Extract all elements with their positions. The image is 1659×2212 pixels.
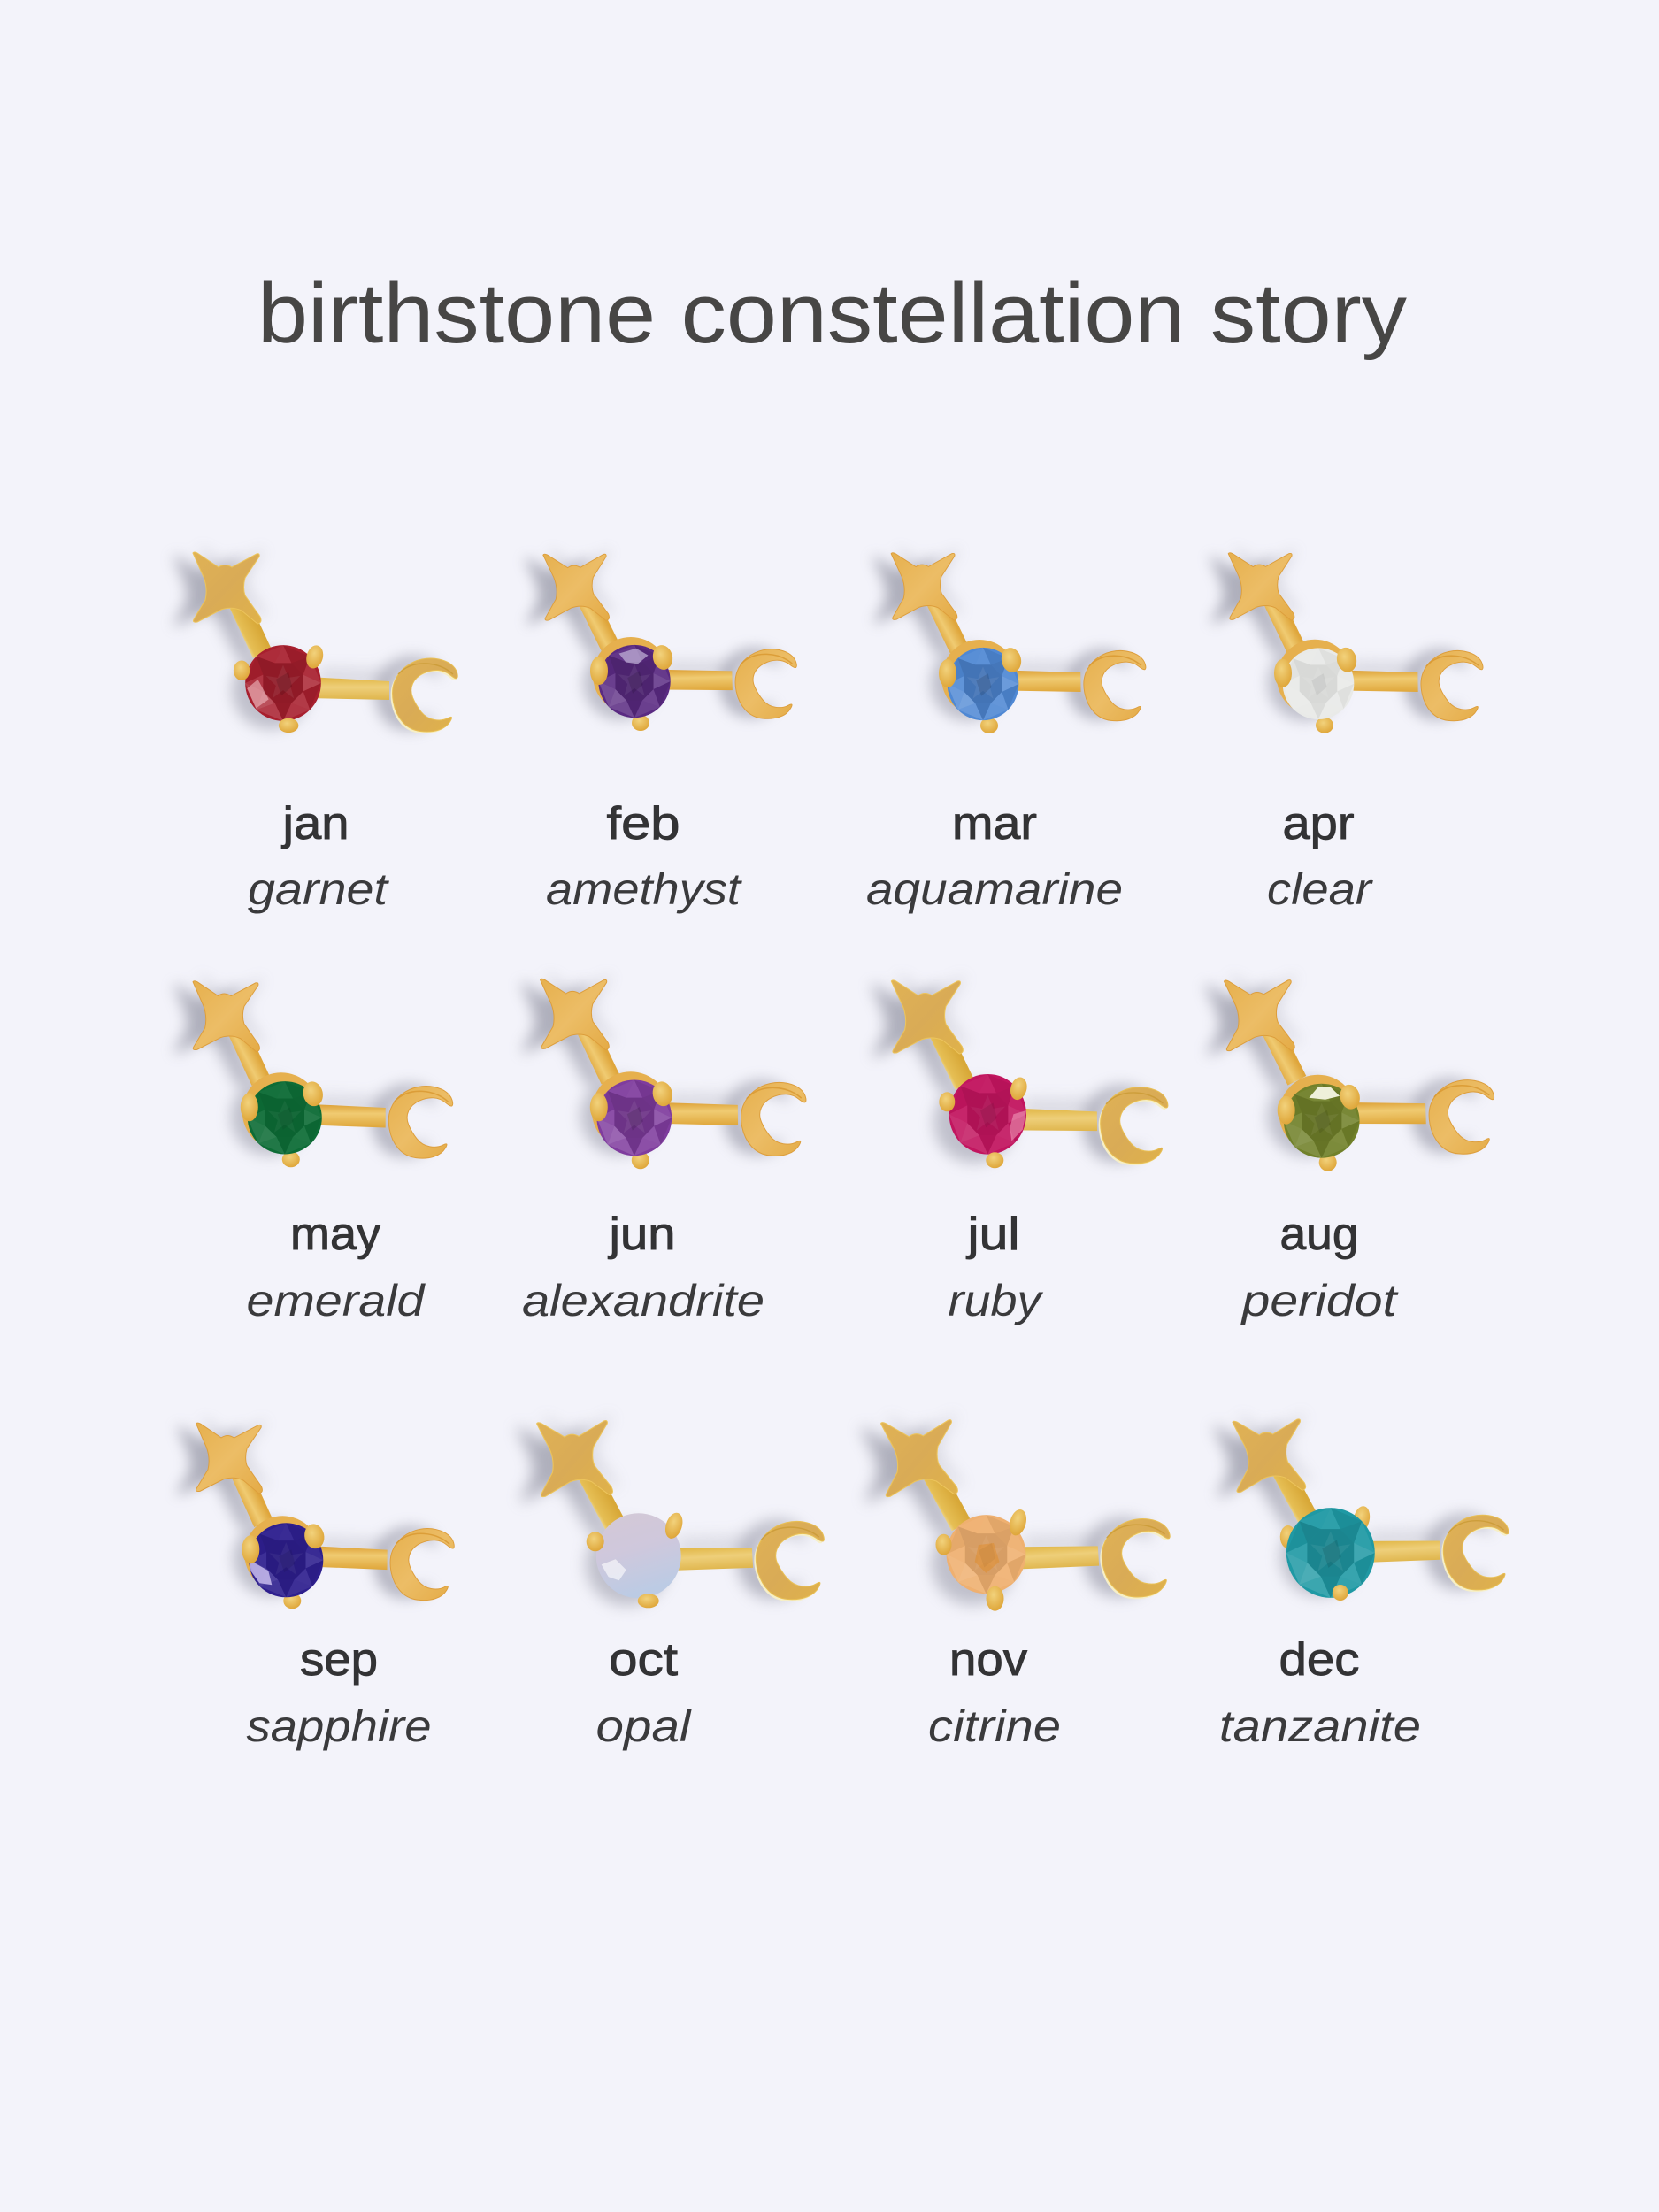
title: birthstone constellation story bbox=[257, 266, 1407, 361]
earring: clear bbox=[1210, 544, 1484, 733]
stone name: peridot: peridot bbox=[1240, 1276, 1399, 1325]
month: apr: apr bbox=[1283, 798, 1354, 849]
stone name: sapphire: sapphire bbox=[246, 1701, 432, 1751]
month: dec: dec bbox=[1279, 1634, 1359, 1686]
month: feb: feb bbox=[607, 798, 680, 849]
earring: sapphire bbox=[176, 1417, 455, 1609]
panel: may emerald bbox=[173, 976, 453, 1325]
earring: alexandrite bbox=[521, 971, 807, 1169]
month: aug: aug bbox=[1279, 1209, 1359, 1260]
month: nov: nov bbox=[949, 1634, 1027, 1686]
month: jun: jun bbox=[607, 1209, 676, 1260]
stone name: ruby: ruby bbox=[949, 1276, 1044, 1325]
panel: june alexandrite bbox=[521, 971, 807, 1325]
panel: november citrine bbox=[860, 1399, 1174, 1751]
earring: aquamarine bbox=[872, 544, 1147, 733]
earring: garnet bbox=[173, 547, 457, 733]
earring: amethyst bbox=[525, 543, 798, 731]
panel: august peridot bbox=[1204, 967, 1496, 1325]
stone name: garnet: garnet bbox=[248, 864, 389, 914]
earring: emerald bbox=[173, 976, 453, 1167]
earring: peridot bbox=[1204, 967, 1496, 1171]
stone name: alexandrite: alexandrite bbox=[522, 1276, 764, 1325]
month: jan: jan bbox=[280, 798, 349, 849]
stone name: amethyst: amethyst bbox=[546, 864, 742, 914]
stone name: emerald: emerald bbox=[246, 1276, 426, 1325]
earring: citrine bbox=[860, 1399, 1174, 1617]
stone name: aquamarine: aquamarine bbox=[866, 864, 1123, 914]
stone name: opal: opal bbox=[596, 1701, 693, 1751]
panel: october opal bbox=[516, 1402, 827, 1751]
earring: tanzanite bbox=[1212, 1401, 1512, 1607]
stone name: tanzanite: tanzanite bbox=[1219, 1701, 1421, 1751]
month: mar: mar bbox=[952, 798, 1037, 849]
earring: opal bbox=[516, 1402, 827, 1616]
earring: ruby bbox=[871, 971, 1169, 1169]
panel: september sapphire bbox=[176, 1417, 455, 1751]
month: sep: sep bbox=[300, 1634, 378, 1686]
stone name: citrine: citrine bbox=[928, 1701, 1061, 1751]
panel: january garnet bbox=[173, 547, 457, 914]
month: oct: oct bbox=[609, 1634, 679, 1686]
panel: march aquamarine bbox=[866, 544, 1147, 914]
month: may: may bbox=[290, 1209, 380, 1260]
panel: april clear bbox=[1210, 544, 1484, 914]
panel: december tanzanite bbox=[1212, 1401, 1512, 1751]
month: jul: jul bbox=[965, 1209, 1019, 1260]
stone name: clear: clear bbox=[1267, 864, 1374, 914]
panel: july ruby bbox=[871, 971, 1169, 1325]
panel: february amethyst bbox=[525, 543, 798, 914]
